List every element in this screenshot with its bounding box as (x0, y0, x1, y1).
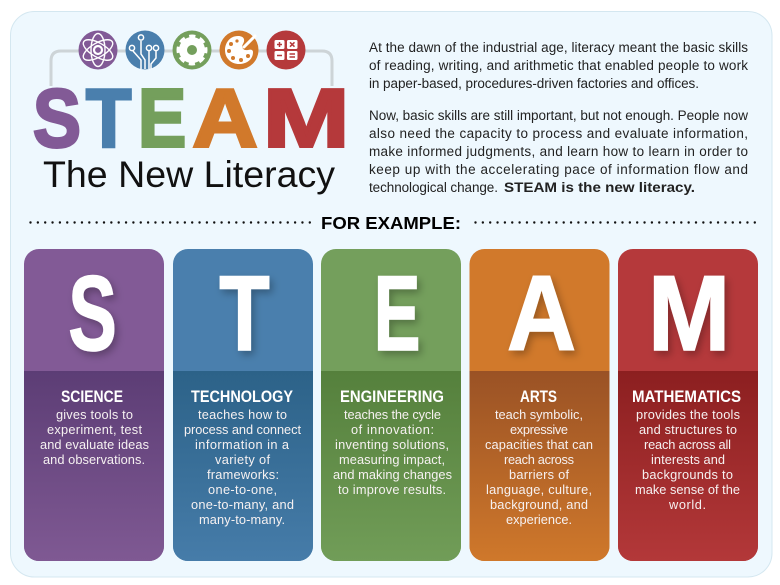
panel: mathematics: M (648, 253, 730, 373)
intro text (369, 40, 748, 195)
panel: mathematics (618, 249, 758, 561)
panel: engineering: inventing solutions, (335, 437, 449, 452)
panel: mathematics: provides the tools (636, 407, 740, 422)
panel: mathematics: reach across all (644, 437, 731, 452)
section heading: for example: FOR EXAMPLE: (321, 213, 461, 233)
panel: arts: ARTS (520, 388, 557, 406)
panel: mathematics: MATHEMATICS (632, 388, 741, 406)
wordmark STEAM: S (33, 72, 81, 164)
logo: STEAM The New Literacy (33, 30, 349, 195)
panel: mathematics: interests and (651, 452, 725, 467)
icon: science atom (78, 30, 118, 70)
panel: technology: many-to-many. (199, 512, 285, 527)
intro text: in paper-based, procedures-driven factories and offices. (369, 76, 699, 91)
panel: engineering: of innovation: (351, 422, 434, 437)
connector line (51, 51, 332, 86)
panel: arts: background, and (490, 497, 588, 512)
panel: arts: language, culture, (486, 482, 592, 497)
panel: science: SCIENCE (61, 388, 123, 406)
panel: technology: frameworks: (207, 467, 279, 482)
subtitle: The New Literacy (43, 154, 336, 195)
panel: mathematics: backgrounds to (642, 467, 733, 482)
icon: arts palette (220, 30, 258, 70)
panel: engineering: ENGINEERING (340, 388, 444, 406)
panel: engineering: measuring impact, (339, 452, 445, 467)
intro text: Now, basic skills are still important, but not enough. People now (369, 108, 748, 123)
panel: engineering: to improve results. (338, 482, 446, 497)
panel: technology: one-to-many, and (191, 497, 294, 512)
panel: technology: teaches how to (198, 407, 287, 422)
panel: technology (173, 249, 313, 561)
intro text: also need the capacity to process and evaluate information, (369, 126, 748, 141)
panel: arts: experience. (506, 512, 572, 527)
wordmark STEAM (33, 72, 349, 164)
panel: arts: reach across (504, 452, 574, 467)
panel: science: experiment, test (47, 422, 142, 437)
icon: technology circuit (126, 30, 164, 70)
wordmark STEAM: T (86, 72, 131, 164)
panel: engineering (321, 249, 461, 561)
wordmark STEAM: E (138, 72, 186, 164)
panel: science: and observations. (43, 452, 145, 467)
panel: technology: variety of (215, 452, 270, 467)
panel: engineering: teaches the cycle (344, 407, 441, 422)
panel: arts: capacities that can (485, 437, 593, 452)
panel: engineering: E (374, 253, 420, 373)
panel: science: gives tools to (56, 407, 133, 422)
panel: mathematics: world. (668, 497, 706, 512)
panel: mathematics: and structures to (639, 422, 737, 437)
panel: science (24, 249, 164, 561)
wordmark STEAM: A (192, 72, 258, 164)
icon: engineering gear (172, 30, 212, 70)
intro text: At the dawn of the industrial age, literacy meant the basic skills (369, 40, 748, 55)
intro text: keep up with the accelerating pace of information flow and (369, 162, 748, 177)
panel: technology: TECHNOLOGY (191, 388, 293, 406)
panel: arts: A (507, 253, 576, 373)
panel: arts (470, 249, 610, 561)
intro text: make informed judgments, and learn how to learn in order to (369, 144, 748, 159)
panel: science: and evaluate ideas (40, 437, 149, 452)
panel: arts: teach symbolic, (495, 407, 583, 422)
panel: engineering: and making changes (333, 467, 452, 482)
panel: arts: barriers of (509, 467, 569, 482)
panel: technology: one-to-one, (208, 482, 277, 497)
intro text: of reading, writing, and arithmetic that enabled people to work (369, 58, 748, 73)
panel: arts: expressive (510, 422, 568, 437)
icon: mathematics calculator (266, 30, 306, 70)
panel: technology: information in a (195, 437, 290, 452)
panel: mathematics: make sense of the (635, 482, 740, 497)
wordmark STEAM: M (263, 72, 349, 164)
intro text: technological change. (369, 180, 498, 195)
panel: science: S (68, 253, 117, 373)
panel: technology: process and connect (184, 422, 301, 437)
panel: technology: T (219, 253, 270, 373)
intro text: STEAM is the new literacy. (504, 180, 695, 195)
